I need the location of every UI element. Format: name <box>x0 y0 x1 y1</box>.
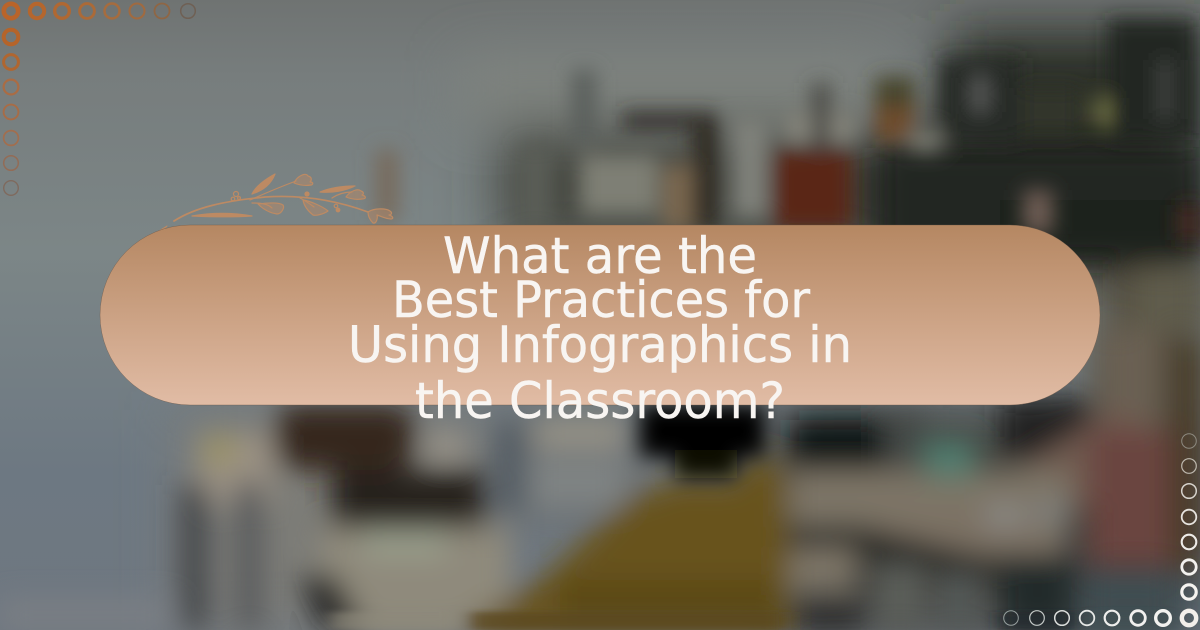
icon: floral sprig above the banner <box>130 174 393 262</box>
ring decoration: top-left <box>4 4 195 195</box>
title: Best Practices for <box>392 271 810 329</box>
title <box>348 227 852 430</box>
bottom edge compensation for blurred shapes <box>330 612 1175 630</box>
title: What are the <box>443 227 757 285</box>
ring decoration: bottom-right <box>1004 434 1196 625</box>
title: Using Infographics in <box>348 316 852 374</box>
title: the Classroom? <box>415 372 785 430</box>
banner pill <box>100 225 1100 405</box>
